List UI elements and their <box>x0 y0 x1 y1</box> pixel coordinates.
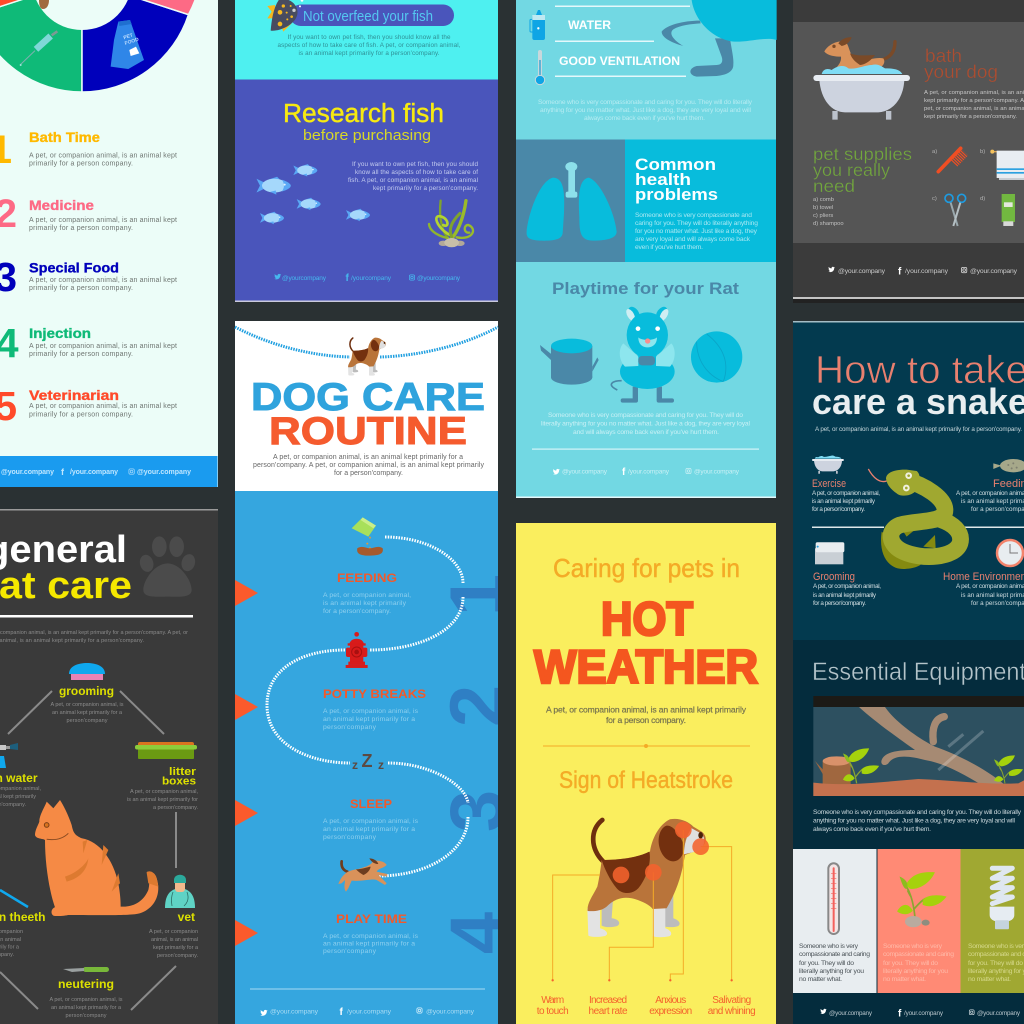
footer: social: @yourcompany <box>417 275 461 282</box>
item: sleep <box>323 797 419 841</box>
icon: light bulb <box>990 868 1014 929</box>
item: vet: animal, is an animal <box>151 937 198 943</box>
text: rat description: anything for you no matter what. Just like a dog, they are very loyal and will <box>540 107 752 114</box>
text: intro: A pet, or companion animal, is an animal kept primarily for a person'company. <box>815 426 1022 433</box>
list item 3 <box>0 254 177 300</box>
item: feeding: A pet, or companion animal, <box>323 592 411 599</box>
symptom labels: to touch <box>537 1006 569 1017</box>
footer: social: @your.company <box>1 469 54 476</box>
footer: social: /your.company <box>905 268 949 275</box>
labels: supplies grid: d) <box>980 196 985 202</box>
item: sleep: A pet, or companion animal, is <box>323 818 419 825</box>
item: potty breaks <box>323 687 426 731</box>
text: Someone who is very compassionate and caring for you. They will do <box>548 412 743 419</box>
intro text <box>0 630 188 644</box>
text: bath description: kept primarily for a person'company. <box>924 114 1017 120</box>
list item 4: Injection <box>29 325 91 341</box>
tile: plant: literally anything for you <box>883 968 948 975</box>
item: vet <box>149 910 199 959</box>
triangle markers <box>235 580 258 946</box>
item: grooming <box>813 571 881 607</box>
icon: sleep zzz <box>352 751 384 772</box>
icons: school of fish <box>256 164 370 224</box>
large rotated numbers: 4 <box>435 912 520 954</box>
heading: Playtime for your Rat <box>552 279 739 298</box>
item: grooming: Grooming <box>813 571 855 583</box>
symptom labels: Warm <box>541 995 564 1006</box>
text: are very loyal and will always come back <box>635 236 751 243</box>
illustration: rat body top <box>662 0 777 77</box>
footer: social: /your.company <box>70 469 118 476</box>
item: exercise: for a person'company. <box>812 506 865 513</box>
symptom labels: heart rate <box>588 1006 628 1017</box>
heading: pet supplies: pet supplies <box>813 144 912 164</box>
illustration: terrarium <box>813 696 1024 796</box>
icon: litter box <box>135 742 197 759</box>
item: litter boxes: litter <box>169 766 197 778</box>
text: rat description: always come back even if you've hurt them. <box>584 115 705 122</box>
item: grooming: for a person'company. <box>813 600 866 607</box>
icon: towel <box>990 150 1024 180</box>
item: vet: kept primarily for a <box>153 945 199 951</box>
list item 3: A pet, or companion animal, is an animal kept <box>29 277 177 284</box>
tile: plant: compassionate and caring <box>883 951 954 958</box>
footer: social: f <box>61 467 65 477</box>
tile: plant: Someone who is very <box>883 943 943 950</box>
footer: social: @your.company <box>838 268 886 275</box>
footer: social: f <box>622 467 626 478</box>
icon: feeding fish <box>993 459 1024 472</box>
panel: essential equipment <box>793 640 1024 1024</box>
icon: ball <box>691 331 742 383</box>
text: overfeed description: If you want to own pet fish, then you should know all the <box>288 34 451 41</box>
item: exercise: A pet, or companion animal, <box>812 490 880 497</box>
item: neutering: neutering <box>58 979 114 991</box>
footer: social: f <box>340 1007 344 1018</box>
icon: pet food bag: FOOD <box>124 37 140 47</box>
text: literally anything for you no matter what. Just like a dog, they are very loyal <box>541 420 750 428</box>
footer: social: /your.company <box>628 468 670 476</box>
heading: pet supplies <box>813 144 912 196</box>
tile: thermometer: for you. They will do <box>799 960 854 967</box>
text: rat description <box>538 99 753 122</box>
connector lines <box>553 830 732 980</box>
list item 3: primarily for a person company. <box>29 285 133 292</box>
text: intro <box>546 704 747 725</box>
panel: fish care <box>235 0 498 302</box>
divider <box>543 744 750 748</box>
footer: social: f <box>346 273 350 284</box>
icon: vet <box>165 875 195 908</box>
icons: supplies <box>938 148 1024 226</box>
tile: bulb <box>960 849 1024 993</box>
text: and will always come back even if you've hurt them. <box>573 429 719 436</box>
subheading: Sign of Heatstroke <box>559 767 733 794</box>
text: research description: fish. A pet, or companion animal, is an animal <box>348 177 478 184</box>
tile: thermometer: literally anything for you <box>799 968 864 975</box>
list item 2: A pet, or companion animal, is an animal kept <box>29 217 177 224</box>
symptom labels: and whining <box>708 1006 756 1017</box>
heading: bath your dog <box>924 46 998 82</box>
text: bath description <box>924 90 1024 120</box>
tile: thermometer: no matter what. <box>799 976 842 983</box>
checklist lines <box>555 6 690 77</box>
icon: feeding <box>352 517 383 556</box>
list item 4: primarily for a person company. <box>29 351 133 358</box>
donut chart <box>0 0 202 92</box>
item: grooming: an animal kept primarily for a <box>52 710 123 716</box>
footer: social: /yourcompany <box>351 275 392 282</box>
text: for you no matter what. Just like a dog, they <box>635 228 758 235</box>
list item 2: primarily for a person company. <box>29 225 133 232</box>
item: grooming: grooming <box>59 686 114 698</box>
heading: pet supplies: need <box>813 176 855 196</box>
tile: plant: for you. They will do <box>883 960 938 967</box>
item: grooming: is an animal kept primarily <box>813 592 877 599</box>
text: rat description: Someone who is very compassionate and caring for you. They will do literally <box>538 99 753 106</box>
icon: seaweed <box>429 201 473 247</box>
icon: pet food bag <box>111 20 144 69</box>
icon: clock <box>997 540 1023 566</box>
icon: sleep zzz: Z <box>362 751 372 771</box>
footer: social <box>274 273 461 284</box>
symptom labels: Anxious <box>655 995 686 1006</box>
text: equipment description: always come back even if you've hurt them. <box>813 826 931 833</box>
icon: pet food bag: PET <box>123 33 134 41</box>
icon: thermometer <box>535 50 545 85</box>
icon: syringe <box>20 31 57 66</box>
symptom labels: Salivating <box>712 995 751 1006</box>
icon: toothbrush <box>0 890 28 907</box>
icon: comb brush <box>69 663 105 680</box>
footer: social: @your.company <box>977 1010 1021 1017</box>
text: Someone who is very compassionate and <box>635 212 752 219</box>
text <box>635 212 758 251</box>
item: grooming: person'company <box>66 718 108 724</box>
footer: social: @your.company <box>270 1008 319 1016</box>
symptom labels: Increased <box>589 995 627 1006</box>
heading: pet supplies: you really <box>813 160 890 180</box>
icon: neutering tool <box>63 967 109 972</box>
item: litter boxes: is an animal kept primarily for <box>127 797 198 803</box>
text: bath description: pet, or companion animal, is an animal <box>924 106 1024 112</box>
item: good ventilation: GOOD VENTILATION <box>559 54 680 68</box>
list item 4: A pet, or companion animal, is an animal kept <box>29 343 177 350</box>
text: research description: know all the aspects of how to take care of <box>355 169 478 176</box>
text: intro: A pet, or companion animal, is an animal kept primarily for a <box>273 454 463 461</box>
footer: social: @your.company <box>694 468 740 476</box>
item: feeding <box>956 478 1024 513</box>
tile: plant <box>878 849 960 993</box>
footer: social: @your.company <box>829 1010 873 1017</box>
heading <box>0 529 193 618</box>
list item 5: A pet, or companion animal, is an animal kept <box>29 403 177 410</box>
item: litter boxes <box>127 766 198 811</box>
item: exercise <box>812 478 880 513</box>
heading: Caring for pets in <box>553 553 740 583</box>
icon: scissors <box>945 194 966 226</box>
list: supplies: c) pliers <box>813 213 833 219</box>
text: intro: A pet, or companion animal, is an animal kept primarily <box>546 704 747 714</box>
item: potty breaks: A pet, or companion animal, is <box>323 708 419 715</box>
icon: log stump <box>540 339 599 385</box>
text: even if you've hurt them. <box>635 244 703 251</box>
text: overfeed description: aspects of how to take care of fish. A pet, or companion animal, <box>278 42 461 49</box>
text: overfeed description <box>278 34 461 57</box>
list: supplies: a) comb <box>813 197 834 203</box>
footer: social: @your.company <box>970 268 1018 275</box>
footer: social: @your.company <box>426 1008 475 1016</box>
panel: pet health wheel poster <box>0 0 218 487</box>
item: clean teeth <box>0 910 46 958</box>
list item 2: Medicine <box>29 197 94 213</box>
text: equipment description: Someone who is very compassionate and caring for you. They will do literally <box>813 809 1022 816</box>
footer: social: /your.company <box>347 1008 392 1016</box>
heading: Common <box>635 156 716 174</box>
item: grooming <box>50 686 124 724</box>
icon: water bottle spray <box>0 743 18 768</box>
heading: research fish <box>283 100 444 144</box>
heading: bath your dog: bath <box>925 46 962 66</box>
icon: thermometer <box>828 863 839 934</box>
banner: not overfeed: Not overfeed your fish <box>303 8 433 25</box>
item: potty breaks: POTTY BREAKS <box>323 687 426 701</box>
footer: social: f <box>898 266 902 278</box>
text: overfeed description: is an animal kept primarily for a person'company. <box>298 50 440 57</box>
icon: spotted fish <box>267 0 303 32</box>
item: exercise: Exercise <box>812 478 846 490</box>
large rotated numbers: 2 <box>435 685 520 727</box>
item: potty breaks: person'company <box>323 724 377 731</box>
item: sleep: person'company <box>323 834 377 841</box>
item: litter boxes: a person'company. <box>153 805 198 811</box>
section: playtime <box>516 262 776 498</box>
text: intro: for a person'company. <box>334 470 403 477</box>
text: caring for you. They will do literally anything <box>635 220 758 227</box>
item: home environment <box>943 571 1024 607</box>
heading <box>635 156 718 204</box>
item: play time: an animal kept primarily for a <box>323 940 415 948</box>
item: play time: person'company <box>323 948 377 955</box>
text: research description: If you want to own pet fish, then you should <box>352 161 478 168</box>
icon: fire hydrant <box>346 632 368 668</box>
symptom markers <box>613 822 709 883</box>
item: vet: A pet, or companion <box>149 929 198 935</box>
tile: plant: no matter what. <box>883 976 926 983</box>
list item 5: Veterinarian <box>29 387 119 403</box>
heading: care a snake <box>812 381 1024 422</box>
illustration: snake <box>868 469 961 569</box>
heading <box>534 553 758 693</box>
section: common health problems <box>516 140 776 262</box>
list item 4 <box>0 320 177 366</box>
item: clean water <box>0 771 41 808</box>
footer: social <box>820 1008 1021 1020</box>
list item 1: Bath Time <box>29 129 100 145</box>
heading: bath your dog: your dog <box>924 62 998 82</box>
large rotated numbers <box>450 576 498 953</box>
list item 1 <box>0 128 177 172</box>
item: sleep: SLEEP <box>350 797 392 811</box>
item: litter boxes: boxes <box>162 776 196 788</box>
labels: supplies grid: b) <box>980 149 985 155</box>
text: research description: kept primarily for a person'company. <box>373 185 478 192</box>
illustration: stump and rat and ball <box>540 305 742 403</box>
heading: How to take <box>815 349 1024 392</box>
heading: dog care routine: ROUTINE <box>269 410 467 453</box>
icon: dog in bathtub <box>813 37 910 120</box>
labels: supplies grid: a) <box>932 149 937 155</box>
panel: general cat care <box>0 509 218 1024</box>
text <box>541 412 750 436</box>
item: sleep: an animal kept primarily for a <box>323 826 415 833</box>
heading: dog care routine: DOG CARE <box>251 376 485 419</box>
large rotated numbers: 3 <box>435 790 520 832</box>
list: supplies: d) shampoo <box>813 221 844 227</box>
footer: social: @your.company <box>137 469 191 476</box>
text: intro <box>253 454 484 477</box>
item: litter boxes: A pet, or companion animal, <box>130 789 198 795</box>
item: neutering: an animal kept primarily for a <box>51 1005 122 1011</box>
heading <box>812 349 1024 422</box>
item: exercise: is an animal kept primarily <box>812 498 876 505</box>
heading: research fish: before purchasing <box>303 127 431 144</box>
symptom labels <box>537 995 756 1017</box>
heading: problems <box>635 186 718 204</box>
item: neutering <box>50 979 123 1019</box>
list item 1: A pet, or companion animal, is an animal kept <box>29 152 177 160</box>
text: bath description: kept primarily for a person'company. A <box>924 98 1024 104</box>
item: grooming: A pet, or companion animal, <box>813 583 881 590</box>
icon: shampoo <box>1002 194 1015 226</box>
footer: social: /your.company <box>904 1010 944 1017</box>
item: potty breaks: an animal kept primarily for a <box>323 716 415 723</box>
icon: running dog <box>338 858 387 892</box>
dotted route <box>267 537 468 876</box>
icon: sleep zzz: z <box>352 758 358 772</box>
text: intro: for a person company. <box>606 715 686 725</box>
heading: WEATHER <box>534 640 758 693</box>
item: water: WATER <box>568 18 611 32</box>
icon: small bathtub <box>812 456 844 474</box>
text: intro: person'company. A pet, or companion animal, is an animal kept primarily <box>253 462 484 469</box>
tile: thermometer: Someone who is very <box>799 943 859 950</box>
illustration: beagle with symptoms <box>551 819 733 981</box>
divider line <box>812 526 1024 528</box>
footer: social <box>553 467 740 478</box>
footer: social <box>0 456 218 487</box>
list item 3: Special Food <box>29 260 119 276</box>
illustration: orange cat <box>35 800 158 916</box>
large rotated numbers: 1 <box>435 574 520 616</box>
icon: brown pet fragment <box>39 0 49 9</box>
footer: social: @yourcompany <box>282 275 327 282</box>
labels: supplies grid: c) <box>932 196 937 202</box>
item: vet: vet <box>178 910 195 924</box>
list: supplies <box>813 197 844 227</box>
footer: social <box>828 266 1018 278</box>
icon: paw print <box>138 536 197 597</box>
connector lines <box>0 691 176 1010</box>
item: vet: person'company. <box>157 953 198 959</box>
item: feeding: FEEDING <box>337 571 397 585</box>
text: equipment description: anything for you no matter what. Just like a dog, they are very loyal and will <box>813 818 1016 824</box>
symptom labels: expression <box>649 1006 692 1017</box>
labels: supplies grid <box>932 149 985 202</box>
heading: HOT <box>601 592 693 645</box>
heading: research fish: Research fish <box>283 100 444 128</box>
list item 5 <box>0 383 177 429</box>
list: supplies: b) towel <box>813 205 833 211</box>
panel: rat care <box>516 0 777 498</box>
item: feeding: for a person'company. <box>323 608 391 615</box>
icon: small beagle <box>348 338 386 376</box>
tile: thermometer <box>793 849 876 993</box>
dotted garland <box>235 327 498 357</box>
panel: hot weather <box>516 523 776 1024</box>
tile: bulb: no matter what. <box>968 976 1011 983</box>
footer: social: @your.company <box>562 468 608 476</box>
panel: snake care <box>793 321 1024 640</box>
item: feeding: is an animal kept primarily <box>323 600 407 607</box>
item: play time: PLAY TIME <box>336 912 407 926</box>
item: neutering: A pet, or companion animal, is <box>50 997 123 1003</box>
panel: bath your dog <box>793 0 1024 303</box>
item: neutering: person'company <box>66 1013 107 1019</box>
footer: social <box>260 1007 475 1018</box>
list item 2 <box>0 192 177 236</box>
icon: grooming box <box>815 542 844 564</box>
icon: rat <box>611 305 675 403</box>
list item 5: primarily for a person company. <box>29 412 133 418</box>
tile: bulb: for you. They will do <box>968 960 1023 967</box>
item: feeding <box>323 571 411 615</box>
footer: social: f <box>898 1008 902 1020</box>
heading: dog care routine <box>251 376 485 453</box>
item: grooming: A pet, or companion animal, is <box>50 702 124 708</box>
item: play time <box>323 912 419 955</box>
item: play time: A pet, or companion animal, is <box>323 933 419 940</box>
heading: health <box>635 171 691 189</box>
text: equipment description <box>813 809 1022 833</box>
icon: sleep zzz: z <box>378 758 384 772</box>
text: research description <box>348 161 478 192</box>
tile: thermometer: compassionate and caring <box>799 951 870 958</box>
icon: comb <box>938 148 965 172</box>
panel: dog care routine <box>235 321 520 1024</box>
list item 1: primarily for a person company. <box>29 160 133 168</box>
icon: water bottle <box>530 10 545 40</box>
icon: plant <box>897 870 948 927</box>
icon: lungs <box>527 162 617 241</box>
